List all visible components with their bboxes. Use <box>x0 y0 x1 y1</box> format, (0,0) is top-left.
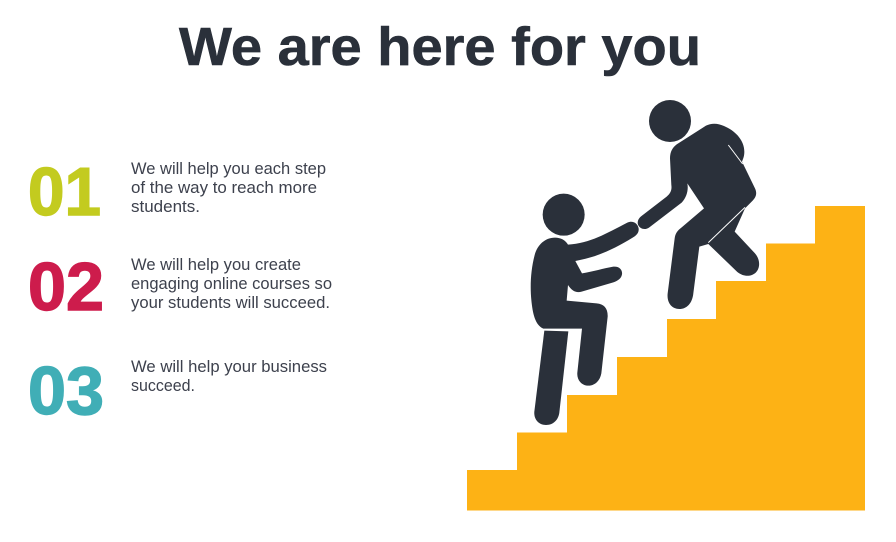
text block 03: succeed. <box>131 376 195 395</box>
step 01 <box>28 154 326 230</box>
text block 02 <box>131 255 332 312</box>
number 03: 03 <box>28 353 104 429</box>
text block 01 <box>131 159 326 216</box>
text block 02: We will help you create <box>131 255 301 274</box>
text block 02: your students will succeed. <box>131 293 330 312</box>
illustration: two people climbing <box>531 100 759 425</box>
text block 03 <box>131 357 327 395</box>
step 02 <box>28 249 332 325</box>
text block 01: of the way to reach more <box>131 178 317 197</box>
number 01: 01 <box>28 154 101 230</box>
title: We are here for you <box>179 17 701 77</box>
text block 01: students. <box>131 197 200 216</box>
step 03 <box>28 353 327 429</box>
person helping from above <box>638 100 759 309</box>
text block 03: We will help your business <box>131 357 327 376</box>
text block 02: engaging online courses so <box>131 274 332 293</box>
number 02: 02 <box>28 249 104 325</box>
staircase <box>467 206 865 510</box>
person reaching from below <box>531 194 639 425</box>
text block 01: We will help you each step <box>131 159 326 178</box>
